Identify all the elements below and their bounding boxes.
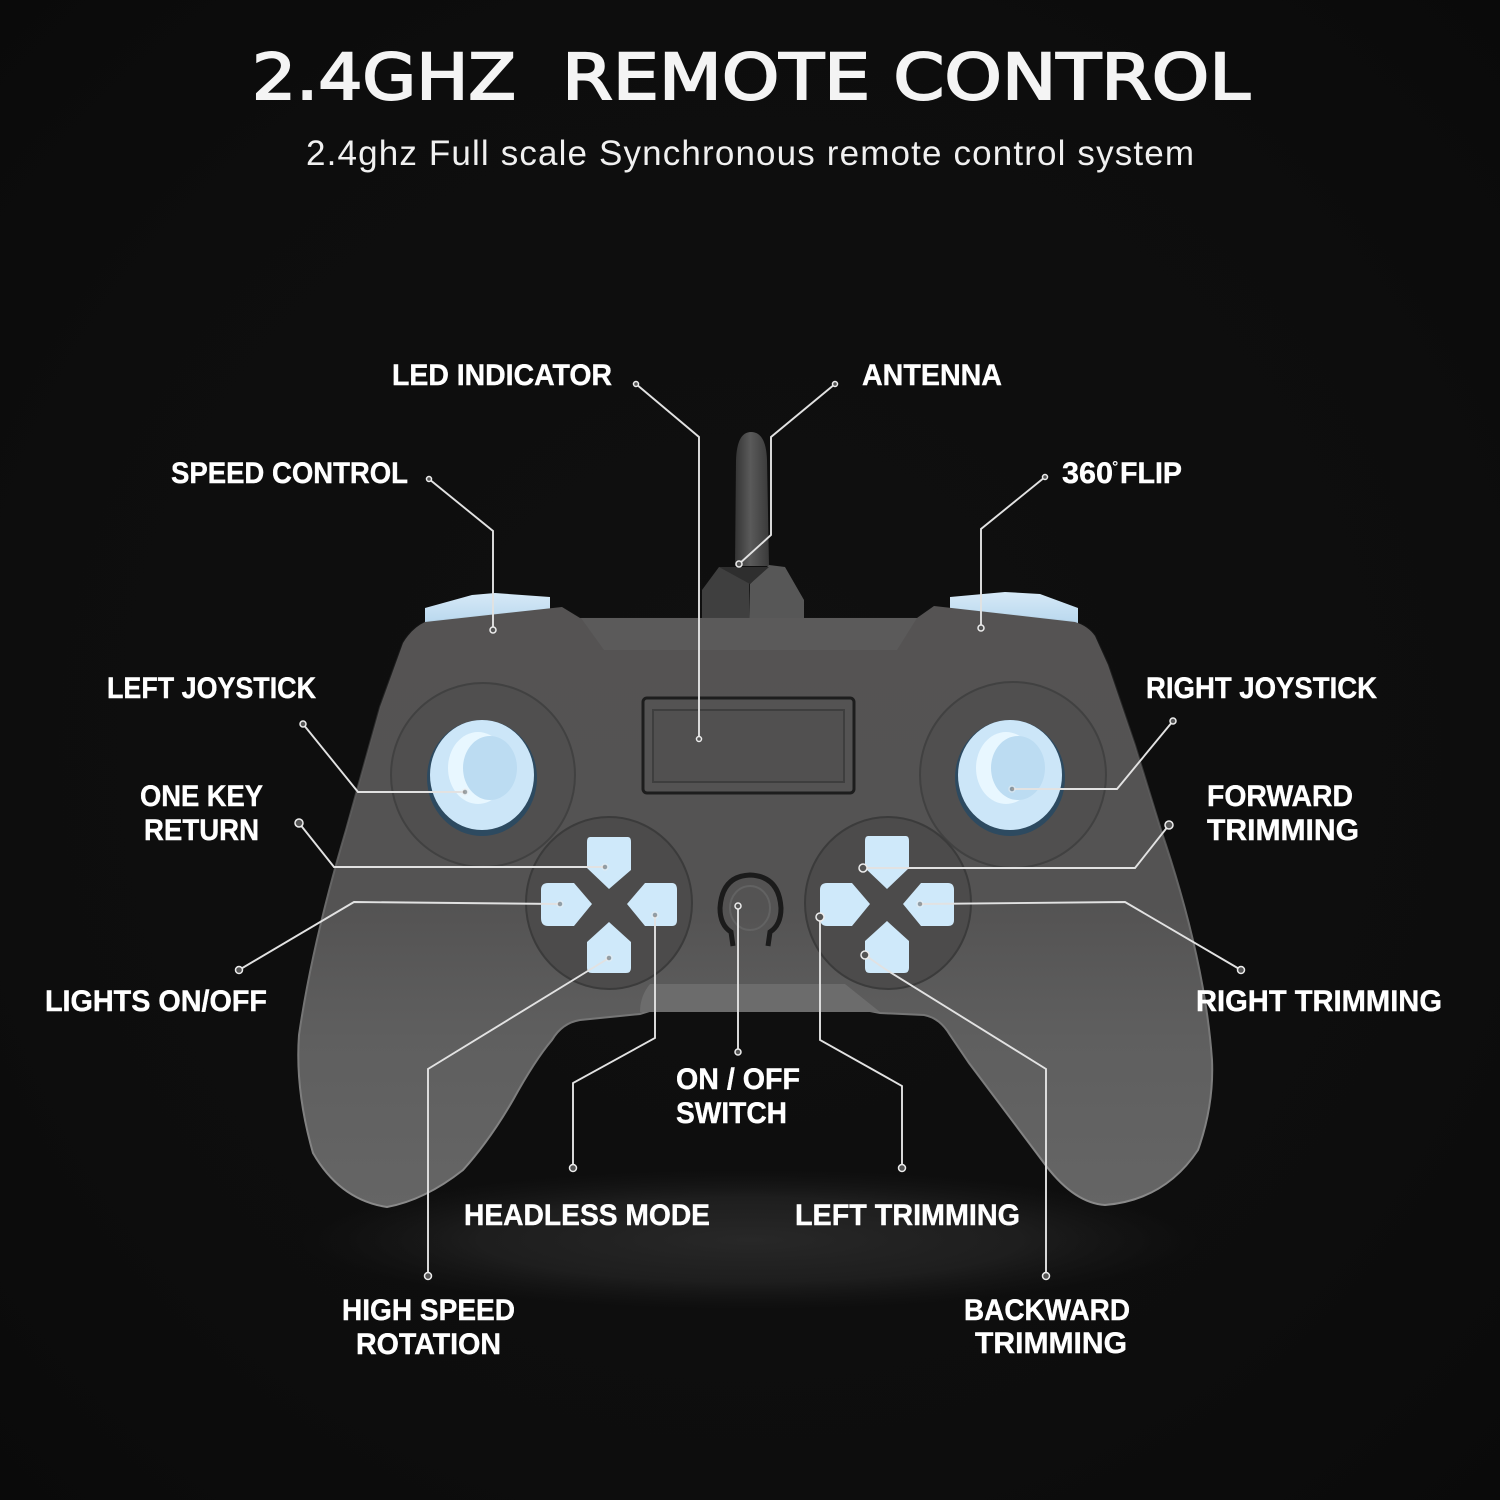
label: speed control: SPEED CONTROL xyxy=(171,457,408,490)
label: antenna: ANTENNA xyxy=(862,359,1002,392)
label: left joystick: LEFT JOYSTICK xyxy=(107,672,316,705)
label: forward trimming xyxy=(1207,780,1359,847)
label: high speed rotation: HIGH SPEED xyxy=(342,1294,515,1327)
button: high speed rotation xyxy=(587,922,631,973)
right joystick xyxy=(920,682,1106,868)
label: on/off switch xyxy=(676,1063,800,1130)
label: 360 flip: FLIP xyxy=(1120,457,1182,490)
title xyxy=(252,41,1250,114)
label: forward trimming: TRIMMING xyxy=(1207,814,1359,847)
label: one key return xyxy=(140,780,263,847)
title: 2.4GHZ xyxy=(252,41,516,114)
label: high speed rotation: ROTATION xyxy=(356,1328,501,1361)
label: backward trimming xyxy=(964,1294,1130,1360)
left joystick xyxy=(391,683,575,867)
label: on/off switch: SWITCH xyxy=(676,1097,787,1130)
label: on/off switch: ON / OFF xyxy=(676,1063,800,1096)
label: 360 flip xyxy=(1062,457,1182,490)
left button pad xyxy=(526,817,692,989)
button: right trimming xyxy=(903,883,954,926)
controller body xyxy=(298,606,1212,1207)
button: one key return xyxy=(587,837,631,889)
button: headless mode xyxy=(627,883,677,926)
label: LED indicator: LED INDICATOR xyxy=(392,359,612,392)
label: right joystick: RIGHT JOYSTICK xyxy=(1146,672,1377,705)
icon: 360 flip trigger xyxy=(950,592,1078,630)
label: lights on/off: LIGHTS ON/OFF xyxy=(45,985,267,1018)
button: left trimming xyxy=(820,883,870,926)
label: 360 flip: 360 xyxy=(1062,457,1113,490)
button: backward trimming xyxy=(865,921,909,973)
leader lines xyxy=(239,384,1241,1276)
label: one key return: RETURN xyxy=(144,814,259,847)
screen xyxy=(643,698,854,793)
label: left trimming: LEFT TRIMMING xyxy=(795,1199,1020,1232)
icon: speed control trigger xyxy=(425,593,550,630)
label: headless mode: HEADLESS MODE xyxy=(464,1199,710,1232)
floor glow xyxy=(300,1170,1200,1310)
label: 360 flip: ° xyxy=(1112,459,1118,476)
leader end dots xyxy=(236,382,1244,1280)
label: backward trimming: TRIMMING xyxy=(975,1327,1127,1360)
title: REMOTE CONTROL xyxy=(562,41,1250,114)
icon: power switch xyxy=(720,875,781,946)
label: one key return: ONE KEY xyxy=(140,780,263,813)
subtitle: 2.4ghz Full scale Synchronous remote control system xyxy=(306,134,1194,173)
button: lights on/off xyxy=(541,883,592,926)
label: backward trimming: BACKWARD xyxy=(964,1294,1130,1327)
icon: antenna xyxy=(702,432,804,625)
right button pad xyxy=(805,817,971,989)
controller xyxy=(298,432,1212,1207)
top bevel xyxy=(581,618,917,650)
label: forward trimming: FORWARD xyxy=(1207,780,1353,813)
label: high speed rotation xyxy=(342,1294,515,1361)
label: right trimming: RIGHT TRIMMING xyxy=(1196,985,1442,1018)
button: forward trimming xyxy=(865,836,909,889)
lower centre strip xyxy=(640,984,880,1012)
